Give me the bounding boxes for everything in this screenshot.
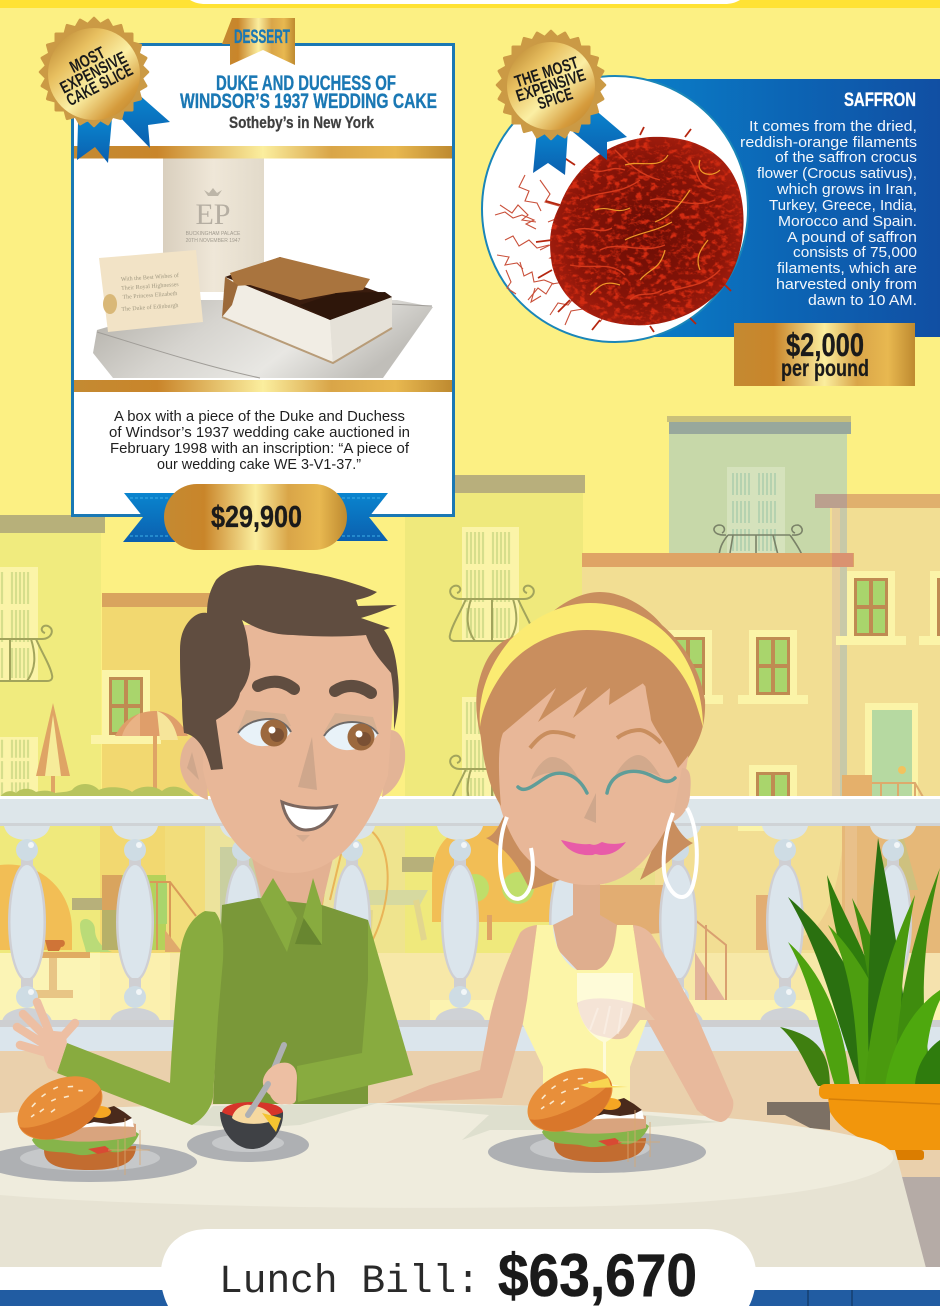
badge text	[51, 35, 136, 110]
building: centre tan	[582, 553, 854, 805]
man: chin shadow	[296, 835, 310, 842]
description	[740, 118, 917, 309]
closed parasol	[36, 703, 70, 796]
badge text: MOST	[67, 43, 109, 77]
saffron mass	[550, 137, 744, 325]
description	[109, 409, 410, 473]
acrylic base	[93, 300, 433, 378]
scene: town buildings	[0, 416, 940, 811]
man	[17, 565, 413, 1125]
man: face	[203, 625, 396, 873]
woman: nose	[584, 793, 596, 823]
building: centre yellow	[405, 475, 585, 811]
woman: hand and glass	[577, 973, 655, 1086]
table	[0, 1103, 926, 1268]
description: of Windsor’s 1937 wedding cake auctioned in	[109, 425, 410, 441]
railing	[0, 796, 940, 1051]
plate left	[0, 1142, 197, 1182]
tablecloth skirt	[0, 1150, 926, 1268]
man: left hand	[17, 1002, 75, 1073]
terrace wall	[0, 1051, 940, 1177]
woman: left arm	[385, 925, 537, 1103]
heading: WINDSOR’S 1937 WEDDING CAKE	[180, 90, 437, 113]
price ribbon: cake	[123, 484, 388, 550]
gold band top	[74, 146, 452, 158]
badge text: SPICE	[535, 84, 575, 113]
wooden box: EP	[195, 198, 231, 231]
man: eyebrows	[258, 682, 371, 693]
woman: headband	[480, 603, 703, 727]
woman: earrings	[500, 808, 697, 899]
loose threads	[495, 175, 628, 325]
venue: Sotheby’s in New York	[229, 113, 374, 132]
pale blocks	[220, 847, 280, 952]
wooden box: 20TH NOVEMBER 1947	[186, 238, 241, 244]
balusters	[2, 826, 918, 1022]
dessert tab	[222, 18, 295, 65]
bowl plate	[187, 1128, 309, 1162]
card note	[99, 250, 203, 332]
description: February 1998 with an inscription: “A piece of	[110, 441, 410, 457]
price plate: saffron	[734, 323, 915, 386]
dessert tab: DESSERT	[234, 27, 290, 48]
description: flower (Crocus sativus),	[757, 165, 917, 182]
saffron threads	[495, 127, 744, 332]
man: nose	[298, 737, 317, 790]
price plate: saffron: per pound	[781, 355, 869, 381]
woman: eyebrows	[530, 730, 661, 748]
cafe arch centre	[432, 826, 552, 922]
grey floor	[880, 1177, 940, 1272]
man: ears	[180, 730, 405, 800]
man: mouth	[282, 802, 336, 830]
tablecloth top	[0, 1103, 893, 1208]
ribbon tails	[533, 108, 627, 175]
man: neck	[250, 850, 335, 960]
plate right	[488, 1131, 706, 1173]
bottom rail	[0, 1020, 940, 1051]
far table and chair	[322, 825, 428, 950]
cafe arch left	[0, 864, 72, 950]
cake tin	[222, 257, 392, 363]
man: right hand	[263, 1063, 297, 1104]
woman: dress	[522, 925, 647, 1103]
top rail	[0, 796, 940, 826]
bowl	[220, 1084, 283, 1149]
table setting	[0, 1056, 706, 1182]
heading: DUKE AND DUCHESS OF	[216, 72, 396, 95]
description: A box with a piece of the Duke and Duchess	[114, 409, 405, 425]
panel: saffron	[482, 76, 940, 386]
badge: the most expensive spice	[497, 31, 627, 175]
heading	[180, 72, 437, 113]
pot	[828, 1098, 940, 1150]
description: our wedding cake WE 3-V1-37.”	[157, 457, 361, 473]
green chair	[80, 919, 150, 952]
woman: neck and chest	[553, 870, 617, 973]
price plate: saffron: $2,000	[786, 327, 864, 363]
cake photo	[93, 158, 433, 378]
wooden box	[163, 158, 264, 292]
building: green upper storey	[667, 416, 851, 555]
card note: The Duke of Edinburgh	[121, 302, 179, 313]
building: small tan	[91, 593, 212, 800]
card note: The Princess Elizabeth	[122, 291, 178, 301]
door and stairs	[102, 875, 196, 952]
man: spoon handle	[270, 1045, 284, 1078]
footer band	[0, 1267, 940, 1306]
seal	[497, 31, 605, 139]
cake price: $29,900	[211, 499, 302, 534]
table shadow	[193, 1103, 720, 1140]
description: harvested only from	[776, 276, 917, 293]
woman: bun	[476, 592, 705, 770]
wooden box: BUCKINGHAM PALACE	[186, 231, 241, 237]
description: consists of 75,000	[793, 244, 917, 261]
woman: eyelashes	[518, 771, 675, 793]
card note: Their Royal Highnesses	[121, 282, 180, 292]
badge text: CAKE SLICE	[63, 60, 136, 110]
description: Turkey, Greece, India,	[769, 197, 917, 214]
woman: ear	[672, 768, 691, 822]
description: Morocco and Spain.	[778, 213, 917, 230]
man: left eye	[238, 719, 291, 746]
lunch bill label: Lunch Bill:	[219, 1260, 480, 1305]
man: left sleeve	[57, 911, 223, 1125]
ribbon tails	[77, 93, 170, 163]
man: collar	[260, 878, 322, 952]
man: right eye	[324, 722, 378, 750]
badge text	[509, 52, 592, 119]
panel: dessert card	[72, 44, 454, 516]
shelf behind plant	[767, 1102, 830, 1130]
badge text: EXPENSIVE	[57, 48, 130, 97]
woman: face	[492, 680, 690, 885]
woman: hair fringe	[480, 630, 702, 806]
badge: most expensive cake slice	[40, 18, 170, 163]
man: torso	[213, 898, 368, 1104]
cafe table	[35, 940, 90, 998]
potted plant	[780, 838, 940, 1160]
description: It comes from the dried,	[749, 118, 917, 135]
man: right sleeve	[297, 920, 413, 1102]
door right	[738, 823, 940, 953]
woman: lips	[561, 840, 626, 855]
building: left yellow	[0, 515, 105, 800]
gold band bottom	[74, 380, 452, 392]
man: hair	[180, 565, 399, 770]
scene: terrace behind railing	[0, 823, 940, 1020]
blue panel	[615, 79, 940, 337]
woman: back hair	[486, 800, 693, 890]
description: reddish-orange filaments	[740, 134, 917, 151]
edge threads	[536, 127, 731, 332]
description: dawn to 10 AM.	[808, 292, 917, 309]
tan wall block and stairs	[600, 868, 726, 1000]
glass reflection on bun	[580, 1078, 628, 1088]
badge text: EXPENSIVE	[514, 65, 588, 106]
card frame	[72, 44, 454, 516]
badge text: THE MOST	[512, 53, 581, 91]
saffron photo circle	[482, 76, 748, 342]
hedge	[0, 784, 195, 797]
building: right tan	[815, 494, 940, 800]
woman	[385, 592, 733, 1122]
lunch bill pill	[161, 1229, 756, 1306]
plant leaves	[780, 838, 940, 1086]
seal	[40, 18, 148, 126]
man: eye shadows	[238, 710, 378, 732]
card note: With the Best Wishes of	[121, 272, 179, 283]
open parasol	[115, 711, 188, 794]
woman: right arm	[633, 925, 733, 1122]
woman: eye shadows	[531, 755, 661, 782]
burger left	[7, 1064, 150, 1175]
burger right	[517, 1056, 660, 1167]
heading: SAFFRON	[844, 90, 916, 111]
description: filaments, which are	[777, 260, 917, 277]
description: of the saffron crocus	[775, 149, 917, 166]
top strip	[0, 0, 940, 8]
description: A pound of saffron	[787, 229, 917, 246]
description: which grows in Iran,	[776, 181, 917, 198]
